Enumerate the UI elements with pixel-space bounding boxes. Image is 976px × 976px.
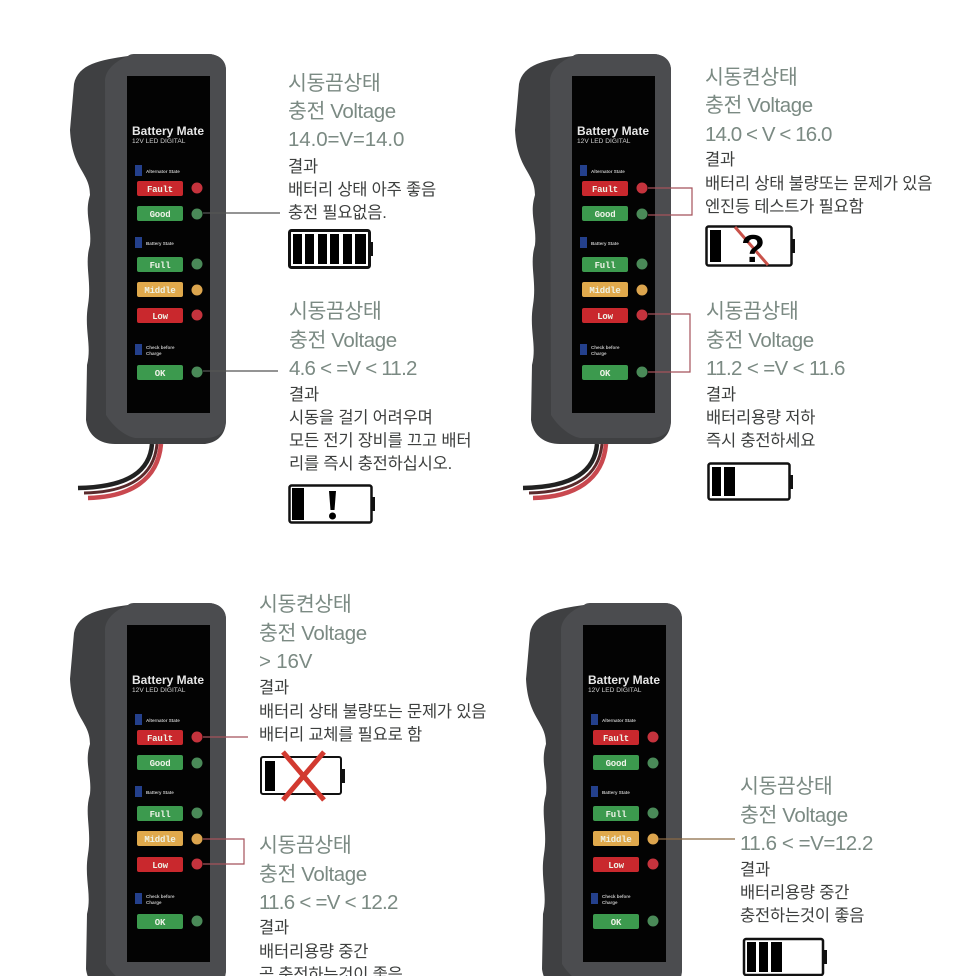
low indicator <box>582 308 648 323</box>
text block: engine on, 14.0 to 16.0: 결과 <box>705 150 735 169</box>
text block: engine off, 14.0 <box>288 72 436 222</box>
device: bottom left tester <box>70 603 226 976</box>
text block: engine off, 4.6 to 11.2: 시동끔상태 <box>289 300 381 323</box>
text block: engine off, 11.6 to 12.2 right: 충전하는것이 좋음 <box>740 906 864 925</box>
device: top right tester <box>515 54 671 498</box>
text block: engine on, above 16: 충전 Voltage <box>259 622 367 645</box>
text block: engine off, 4.6 to 11.2 <box>289 300 471 473</box>
text block: engine on, above 16: 결과 <box>259 678 289 697</box>
text block: engine off, 11.6 to 12.2 left: 시동끔상태 <box>259 834 351 857</box>
brand title <box>577 124 649 145</box>
icon: battery three bars <box>744 939 827 975</box>
brand title: Battery Mate <box>577 124 649 138</box>
brand title: 12V LED DIGITAL <box>132 687 186 694</box>
brand title: Battery Mate <box>588 673 660 687</box>
tester body <box>70 603 226 976</box>
low indicator: Low <box>597 312 614 322</box>
alternator state label <box>580 165 625 176</box>
text block: engine off, 14.0: 14.0=V=14.0 <box>288 128 404 151</box>
low indicator: Low <box>152 312 169 322</box>
brand title: 12V LED DIGITAL <box>588 687 642 694</box>
text block: engine on, 14.0 to 16.0: 시동켠상태 <box>705 66 797 89</box>
text block: engine off, 11.6 to 12.2 right: 시동끔상태 <box>740 775 832 798</box>
brand title <box>132 124 204 145</box>
text block: engine off, 11.6 to 12.2 right: 11.6 < =V=12.2 <box>740 832 873 855</box>
tester body <box>70 54 226 444</box>
fault indicator <box>137 730 202 745</box>
low indicator <box>137 308 202 323</box>
text block: engine off, 11.6 to 12.2 right: 충전 Voltage <box>740 804 848 827</box>
text block: engine off, 11.2 to 11.6: 시동끔상태 <box>706 300 798 323</box>
text block: engine off, 11.2 to 11.6: 11.2 < =V < 11.6 <box>706 357 845 380</box>
good indicator: Good <box>595 210 615 220</box>
text block: engine off, 4.6 to 11.2: 모든 전기 장비를 끄고 배터 <box>289 431 471 450</box>
text block: engine off, 11.6 to 12.2 left: 11.6 < =V < 12.2 <box>259 891 398 914</box>
check before charge label <box>580 344 620 356</box>
text block: engine on, 14.0 to 16.0 <box>705 66 932 216</box>
full indicator: Full <box>595 261 616 271</box>
middle indicator <box>137 831 202 846</box>
check before charge label: Check before <box>146 345 175 350</box>
middle indicator <box>137 282 202 297</box>
good indicator <box>582 206 648 221</box>
check before charge label: Check before <box>146 894 175 899</box>
text block: engine off, 4.6 to 11.2: 리를 즉시 충전하십시오. <box>289 454 452 473</box>
icon: battery with question mark <box>706 226 795 271</box>
full indicator <box>137 806 202 821</box>
icon: battery two bars <box>708 464 793 500</box>
device: bottom right tester <box>526 603 682 976</box>
alternator state label <box>591 714 636 725</box>
text block: engine off, 11.6 to 12.2 left <box>259 834 403 976</box>
text block: engine off, 14.0: 충전 Voltage <box>288 100 396 123</box>
icon: battery with question mark: ? <box>741 228 765 271</box>
middle indicator: Middle <box>600 835 632 845</box>
text block: engine off, 14.0: 충전 필요없음. <box>288 203 387 222</box>
good indicator <box>137 206 202 221</box>
check before charge label: Charge <box>146 351 162 356</box>
check before charge label <box>135 893 175 905</box>
full indicator: Full <box>606 810 627 820</box>
alternator state label <box>135 714 180 725</box>
connector: middle to text <box>658 838 735 840</box>
fault indicator <box>582 181 648 196</box>
middle indicator <box>593 831 658 846</box>
battery state label: Battery State <box>146 241 174 246</box>
ok indicator: OK <box>155 369 166 379</box>
battery state label <box>580 237 619 248</box>
full indicator: Full <box>150 261 171 271</box>
connector: ok to second text <box>203 370 278 372</box>
full indicator <box>593 806 658 821</box>
text block: engine off, 11.6 to 12.2 left: 결과 <box>259 918 289 937</box>
text block: engine off, 11.6 to 12.2 left: 배터리용량 중간 <box>259 942 368 961</box>
check before charge label: Check before <box>602 894 631 899</box>
icon: full battery <box>290 230 373 268</box>
battery state label <box>135 786 174 797</box>
icon: battery with exclamation <box>290 486 375 522</box>
connector: good to first text <box>203 212 280 214</box>
ok indicator <box>593 914 658 929</box>
full indicator <box>582 257 648 272</box>
text block: engine on, 14.0 to 16.0: 배터리 상태 불량또는 문제가 있음 <box>705 174 932 193</box>
connector: low and ok bracket <box>648 314 690 372</box>
text block: engine off, 4.6 to 11.2: 시동을 걸기 어려우며 <box>289 408 433 427</box>
text block: engine off, 11.2 to 11.6: 충전 Voltage <box>706 329 814 352</box>
text block: engine on, above 16 <box>259 593 486 744</box>
battery state label: Battery State <box>591 241 619 246</box>
fault indicator: Fault <box>603 734 629 744</box>
alternator state label: Alternator State <box>146 169 180 174</box>
ok indicator <box>137 365 202 380</box>
ok indicator <box>137 914 202 929</box>
alternator state label: Alternator State <box>602 718 636 723</box>
middle indicator: Middle <box>144 835 176 845</box>
alternator state label: Alternator State <box>591 169 625 174</box>
good indicator: Good <box>606 759 626 769</box>
battery state label <box>591 786 630 797</box>
check before charge label <box>591 893 631 905</box>
ok indicator: OK <box>611 918 622 928</box>
low indicator <box>593 857 658 872</box>
middle indicator: Middle <box>144 286 176 296</box>
low indicator: Low <box>608 861 625 871</box>
fault indicator: Fault <box>147 185 173 195</box>
cable <box>78 444 161 498</box>
tester body <box>526 603 682 976</box>
ok indicator: OK <box>155 918 166 928</box>
text block: engine off, 4.6 to 11.2: 결과 <box>289 385 319 404</box>
connector: middle and low bracket <box>203 839 244 864</box>
fault indicator <box>137 181 202 196</box>
text block: engine off, 11.6 to 12.2 right: 결과 <box>740 860 770 879</box>
full indicator: Full <box>150 810 171 820</box>
fault indicator <box>593 730 658 745</box>
brand title: Battery Mate <box>132 673 204 687</box>
check before charge label: Charge <box>146 900 162 905</box>
text block: engine off, 11.6 to 12.2 right: 배터리용량 중간 <box>740 883 849 902</box>
text block: engine off, 11.2 to 11.6: 결과 <box>706 385 736 404</box>
middle indicator <box>582 282 648 297</box>
text block: engine on, 14.0 to 16.0: 충전 Voltage <box>705 94 813 117</box>
icon: battery crossed out <box>261 752 345 800</box>
battery state label: Battery State <box>602 790 630 795</box>
text block: engine on, 14.0 to 16.0: 엔진등 테스트가 필요함 <box>705 197 864 216</box>
brand title: Battery Mate <box>132 124 204 138</box>
fault indicator: Fault <box>147 734 173 744</box>
alternator state label: Alternator State <box>146 718 180 723</box>
brand title <box>588 673 660 694</box>
text block: engine off, 4.6 to 11.2: 충전 Voltage <box>289 329 397 352</box>
text block: engine on, above 16: 시동켠상태 <box>259 593 351 616</box>
text block: engine off, 11.2 to 11.6: 배터리용량 저하 <box>706 408 815 427</box>
good indicator <box>593 755 658 770</box>
brand title: 12V LED DIGITAL <box>577 138 631 145</box>
brand title <box>132 673 204 694</box>
battery state label: Battery State <box>146 790 174 795</box>
full indicator <box>137 257 202 272</box>
ok indicator: OK <box>600 369 611 379</box>
fault indicator: Fault <box>592 185 618 195</box>
tester body <box>515 54 671 444</box>
alternator state label <box>135 165 180 176</box>
text block: engine on, above 16: > 16V <box>259 650 313 673</box>
battery state label <box>135 237 174 248</box>
text block: engine off, 11.2 to 11.6: 즉시 충전하세요 <box>706 431 815 450</box>
low indicator: Low <box>152 861 169 871</box>
cable <box>523 444 606 498</box>
check before charge label <box>135 344 175 356</box>
connector: fault to text <box>203 736 248 738</box>
middle indicator: Middle <box>589 286 621 296</box>
text block: engine off, 11.2 to 11.6 <box>706 300 845 450</box>
check before charge label: Charge <box>602 900 618 905</box>
good indicator: Good <box>150 759 170 769</box>
text block: engine off, 11.6 to 12.2 left: 충전 Voltage <box>259 863 367 886</box>
check before charge label: Charge <box>591 351 607 356</box>
brand title: 12V LED DIGITAL <box>132 138 186 145</box>
text block: engine on, above 16: 배터리 상태 불량또는 문제가 있음 <box>259 702 486 721</box>
text block: engine on, above 16: 배터리 교체를 필요로 함 <box>259 725 422 744</box>
text block: engine off, 14.0: 배터리 상태 아주 좋음 <box>288 180 436 199</box>
text block: engine on, 14.0 to 16.0: 14.0 < V < 16.0 <box>705 123 832 146</box>
good indicator: Good <box>150 210 170 220</box>
low indicator <box>137 857 202 872</box>
check before charge label: Check before <box>591 345 620 350</box>
text block: engine off, 4.6 to 11.2: 4.6 < =V < 11.2 <box>289 357 417 380</box>
text block: engine off, 14.0: 시동끔상태 <box>288 72 380 95</box>
good indicator <box>137 755 202 770</box>
ok indicator <box>582 365 648 380</box>
device: top left tester <box>70 54 226 498</box>
text block: engine off, 11.6 to 12.2 right <box>740 775 873 925</box>
text block: engine off, 14.0: 결과 <box>288 157 318 176</box>
connector: fault and good bracket <box>648 188 692 215</box>
